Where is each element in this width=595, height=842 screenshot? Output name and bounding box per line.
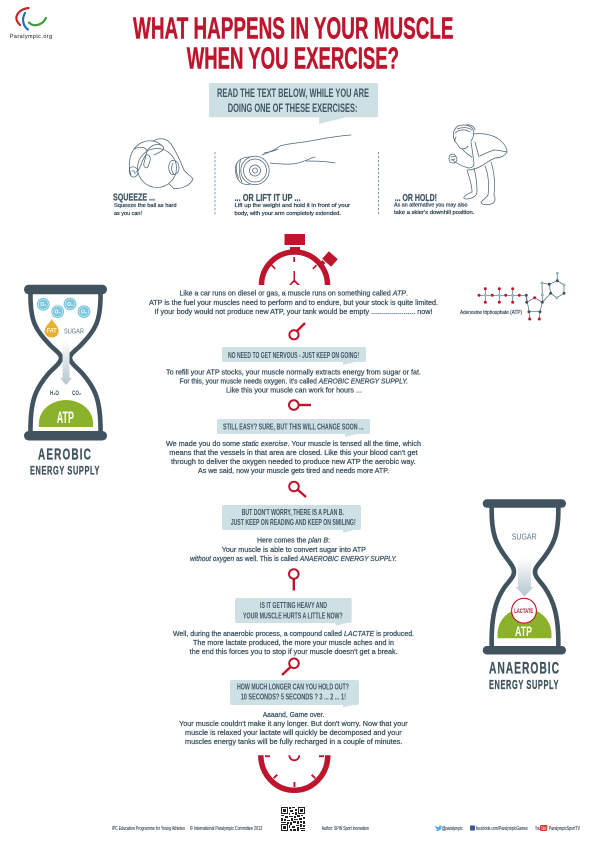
callout: plan B <box>222 505 361 533</box>
paragraph: aerobic energy <box>166 368 421 395</box>
paragraph: plan B <box>190 536 397 563</box>
callout: no need to get nervous: NO NEED TO GET NERVOUS - JUST KEEP ON GOING! <box>228 351 359 360</box>
paragraph: ATP intro: ATP is the fuel your muscles need to perform and to endure, but your stock is quite limited. <box>149 298 438 307</box>
label: aerobic energy supply <box>30 447 100 478</box>
ATP dome <box>497 608 552 639</box>
hourglass: aerobic <box>24 285 107 440</box>
footer: credits <box>112 825 369 832</box>
footer: credits: © International Paralympic Committee 2013 <box>190 825 262 832</box>
text: squeeze: as you can! <box>114 211 142 217</box>
illustration: hand squeezing ball <box>129 139 193 189</box>
paragraph: lactate: The more lactate produced, the more your muscle aches and in <box>193 638 394 647</box>
icon: stopwatch top <box>262 234 338 285</box>
icon: magnifier 4 <box>289 569 299 590</box>
callout: plan B: JUST KEEP ON READING AND KEEP ON SMILING! <box>231 518 356 527</box>
paragraph: aerobic energy: To refill your ATP stocks, your muscle normally extracts energy from sugar or fat. <box>166 368 421 377</box>
paragraph: lactate <box>173 629 414 656</box>
callout: still easy: STILL EASY? SURE, BUT THIS WILL CHANGE SOON ... <box>223 423 364 432</box>
paragraph: static exercise: As we said, now your muscle gets tired and needs more ATP. <box>198 466 389 475</box>
title <box>133 10 454 75</box>
illustration: woman in downhill position <box>449 125 507 205</box>
callout: how much longer: 10 SECONDS? 5 SECONDS ? 3 ... 2 ... 1! <box>241 693 346 702</box>
footer: credits: Author: SPIN Sport Innovation <box>322 826 369 832</box>
icon: fat drop: FAT <box>47 329 57 335</box>
paragraph: game over: Your muscle couldn't make it any longer. But don't worry. Now that your <box>179 719 408 728</box>
text: or hold: As an alternative you may also <box>394 202 468 208</box>
paragraph: plan B: Your muscle is able to convert sugar into ATP <box>222 545 366 554</box>
icon: lactate badge <box>512 598 536 623</box>
icon: oxygen molecules: O₂ <box>55 310 61 316</box>
ATP dome: ATP <box>57 409 74 427</box>
footer: social links: facebook.com/ParalympicGames <box>476 826 528 832</box>
text: squeeze <box>113 192 176 217</box>
paragraph: aerobic energy: Like this your muscle can work for hours ... <box>226 386 362 395</box>
paragraph: lactate: the end this forces you to stop if your muscle doesn't get a break. <box>190 647 398 656</box>
callout: getting heavy: IS IT GETTING HEAVY AND <box>260 601 327 610</box>
footer: social links: You <box>535 826 540 832</box>
callout: how much longer <box>230 680 359 707</box>
footer: social links: ParalympicSportTV <box>549 826 580 832</box>
callout: read the text: READ THE TEXT BELOW, WHILE YOU ARE <box>217 86 369 100</box>
text: squeeze: Squeeze the ball as hard <box>114 203 176 209</box>
paragraph: game over <box>179 710 408 746</box>
callout: read the text: DOING ONE OF THESE EXERCISES: <box>228 101 358 115</box>
paragraph: static exercise: means that the vessels in that area are closed. Like this your blood can't get <box>169 448 418 457</box>
icon: magnifier 5 <box>282 658 299 675</box>
diagram: adenosine triphosphate molecule: Adenosine triphosphate (ATP) <box>460 310 522 316</box>
callout: getting heavy <box>235 598 352 626</box>
label: aerobic energy supply: ENERGY SUPPLY <box>30 464 100 478</box>
text: squeeze: SQUEEZE ... <box>113 192 155 204</box>
illustration: arm lifting weight <box>235 135 351 185</box>
callout: no need to get nervous <box>222 347 366 365</box>
callout: how much longer: HOW MUCH LONGER CAN YOU HOLD OUT? <box>237 683 349 692</box>
hourglass: anaerobic: SUGAR <box>512 532 537 542</box>
logo: Paralympic agitos: Paralympic.org <box>10 34 52 40</box>
paragraph: aerobic energy: For this, your muscle needs oxygen. It's called AEROBIC ENERGY SUPPLY. <box>180 377 408 386</box>
paragraph: static exercise: We made you do some static exercise. Your muscle is tensed all the time, which <box>166 439 421 448</box>
icon: oxygen molecules: O₂ <box>81 310 87 316</box>
footer: credits: IPC Education Programme for Young Athletes <box>112 826 185 832</box>
paragraph: ATP intro <box>149 289 438 316</box>
hourglass: aerobic: H₂O <box>50 390 59 397</box>
title: WHEN YOU EXERCISE? <box>187 40 399 75</box>
text: or hold <box>394 192 475 216</box>
paragraph: game over: muscle is relaxed your lactate will quickly be decomposed and your <box>185 728 402 737</box>
text: or hold: ... OR HOLD! <box>395 192 437 204</box>
callout: read the text <box>209 83 378 124</box>
text: lift it up: Lift up the weight and hold it in front of your <box>234 203 350 209</box>
paragraph: plan B: without oxygen as well. This is called ANAEROBIC ENERGY SUPPLY. <box>190 554 397 563</box>
text: lift it up <box>234 192 350 217</box>
text: lift it up: body, with your arm completely extended. <box>234 211 341 217</box>
icon: lactate badge: LACTATE <box>514 609 533 615</box>
text: or hold: take a skier's downhill position. <box>394 210 475 216</box>
icon: oxygen molecules: O₂ <box>40 302 46 308</box>
paragraph: ATP intro: If your body would not produce new ATP, your tank would be empty ...................... now! <box>154 307 433 316</box>
hourglass: anaerobic <box>483 499 566 654</box>
hourglass: aerobic: SUGAR <box>64 328 84 336</box>
paragraph: ATP intro: Like a car runs on diesel or gas, a muscle runs on something called ATP. <box>180 289 408 298</box>
paragraph: static exercise: through to deliver the oxygen needed to produce new ATP the aerobic way. <box>171 457 416 466</box>
label: aerobic energy supply: AEROBIC <box>38 447 92 464</box>
label: anaerobic energy supply <box>489 658 560 692</box>
footer: social links: @paralympic <box>442 826 463 832</box>
icon: stopwatch bottom <box>261 755 328 790</box>
footer: social links: Tube <box>541 826 547 832</box>
callout: plan B: BUT DON'T WORRY, THERE IS A PLAN B. <box>242 508 344 517</box>
diagram: adenosine triphosphate molecule <box>460 272 566 320</box>
icon: magnifier 2 <box>289 400 311 410</box>
ATP dome: ATP <box>515 623 532 639</box>
callout: still easy <box>217 419 370 437</box>
paragraph: game over: Aaaand, Game over. <box>263 710 324 719</box>
footer: social links <box>435 825 580 832</box>
icon: oxygen molecules <box>37 298 90 318</box>
icon: fat drop <box>45 319 59 338</box>
icon: magnifier 3 <box>289 482 306 497</box>
paragraph: game over: muscles energy tanks will be fully recharged in a couple of minutes. <box>185 737 402 746</box>
text: lift it up: ... OR LIFT IT UP ... <box>234 192 301 204</box>
ATP dome <box>39 400 93 427</box>
icon: magnifier 1 <box>289 323 305 339</box>
paragraph: lactate: Well, during the anaerobic process, a compound called LACTATE is produced. <box>173 629 414 638</box>
logo: Paralympic agitos <box>10 8 52 40</box>
QR code <box>281 807 305 831</box>
hourglass: aerobic: CO₂ <box>72 390 81 397</box>
paragraph: plan B: Here comes the plan B: <box>257 536 330 545</box>
icon: oxygen molecules: O₂ <box>67 302 73 308</box>
callout: getting heavy: YOUR MUSCLE HURTS A LITTLE NOW? <box>243 611 343 620</box>
paragraph: static exercise <box>166 439 421 475</box>
